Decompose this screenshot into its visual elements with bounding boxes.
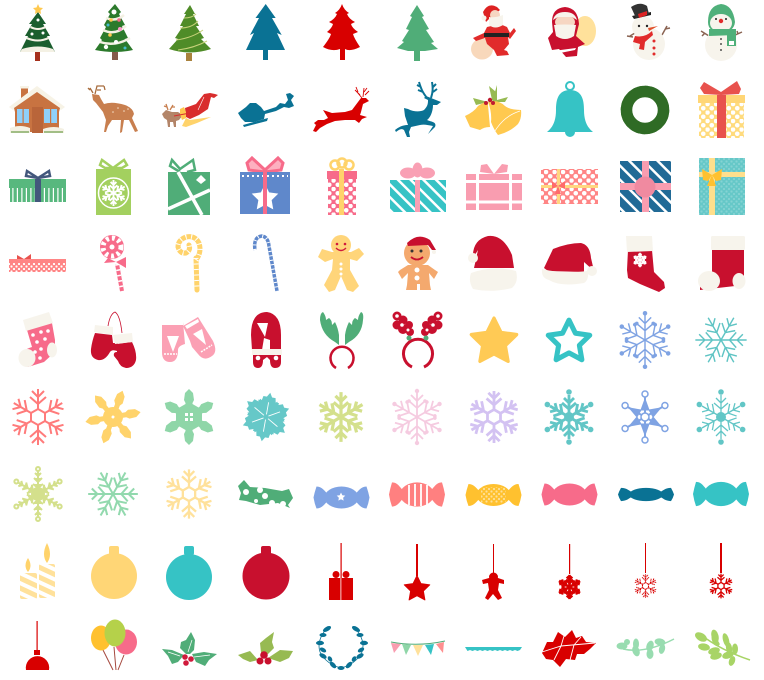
icon: teal solid snowflake (235, 388, 297, 446)
icon: lilac snowflake (468, 391, 520, 443)
icon: crimson stocking with snowflake (626, 236, 665, 292)
icon: teal bauble (166, 546, 212, 600)
icon: green tree with garland (95, 4, 133, 60)
icon: blue candy with star (314, 486, 370, 508)
icon: yellow bauble (91, 546, 137, 599)
icon: gingerbread with santa hat (398, 237, 438, 290)
icon: hanging open snowflake (709, 543, 733, 598)
icon: red mittens with string (91, 312, 136, 368)
icon: teal sleigh silhouette (238, 93, 294, 127)
icon: salmon snowflake (10, 389, 66, 445)
icon: yellow dotted candy (466, 484, 522, 506)
icon: green candy with dots (238, 480, 293, 508)
icon: decorated dark green tree with star (20, 4, 55, 61)
icon: pink lollipop (100, 235, 126, 291)
icon: snowy cabin (9, 86, 65, 133)
icon: yellow-green snowflake (316, 392, 366, 442)
icon: santa with sack (471, 5, 516, 60)
icon: teal thin snowflake (686, 305, 756, 375)
icon: yellow candy cane swirl (178, 237, 200, 290)
icon: mint snowflake (162, 389, 216, 445)
icon: salmon striped candy (389, 482, 445, 507)
icon: crimson stocking cream toe (698, 236, 746, 291)
icon: yellow star (471, 318, 517, 361)
icon: pine tree with gold garland (169, 5, 211, 61)
icon: salmon dotted gift (541, 169, 598, 204)
icon: pale pink snowflake (388, 389, 446, 445)
icon: green holly with berries (162, 632, 217, 666)
icon: pale yellow lace snowflake (164, 469, 214, 519)
icon: red spotted antler headband (392, 312, 442, 367)
icon: green bar gift with navy ribbon (9, 171, 66, 202)
icon: teal tree silhouette (246, 4, 285, 60)
icon: flat salmon gift box (9, 254, 66, 272)
icon: santa in crimson with yellow sack (548, 7, 596, 57)
icon: hanging gingerbread (482, 544, 504, 600)
icon: bunting flags (391, 641, 445, 656)
icon: yellow snowflake (79, 382, 147, 452)
icon: teal dotted snowflake (541, 389, 597, 445)
icon: mint leaf branch (616, 638, 674, 659)
icon: green gift with white ribbon (168, 160, 210, 215)
icon: blue ring snowflake (620, 391, 670, 443)
icon: santa hat large (468, 236, 517, 291)
icon: hanging fine snowflake (633, 543, 658, 598)
icon: green antler headband (320, 312, 363, 368)
icon: teal bell (547, 82, 593, 137)
icon: bright green tree silhouette (397, 5, 438, 61)
icon: hanging dense snowflake (557, 544, 582, 599)
icon: lime gift with snowflake disc (96, 160, 131, 215)
icon: snowman with green hood (701, 4, 742, 61)
icon: balloons (91, 620, 137, 670)
icon: olive holly with berries (238, 632, 293, 664)
icon: teal laurel wreath (316, 625, 368, 670)
icon: pink mittens (162, 317, 215, 362)
icon: striped candles (20, 543, 55, 599)
icon: teal gift with gold bow (699, 158, 745, 215)
icon: teal striped gift with pink bow (390, 162, 446, 212)
icon: blue gift with star (240, 158, 290, 214)
icon: santa hat wide (542, 243, 597, 284)
icon: golden bells with holly (465, 85, 521, 135)
icon: green leaf branch (693, 629, 750, 667)
icon: red leaping deer (313, 87, 369, 132)
icon: reindeer and red sleigh (162, 93, 218, 127)
icon: snowman with top hat (627, 4, 670, 60)
icon: dark teal candy (618, 488, 674, 501)
icon: navy striped gift with flower (620, 161, 671, 212)
icon: brown deer (88, 86, 138, 133)
icon: pink banded gift (466, 164, 522, 210)
icon: hanging red ornament (26, 621, 49, 670)
icon: blue dotted snowflake (615, 311, 675, 369)
icon: teal outline star (548, 320, 590, 360)
icon: yellow gingerbread (318, 235, 364, 292)
icon: hanging red star (404, 544, 430, 600)
icon: yellow-green radial snowflake (12, 467, 64, 521)
icon: teal candy (693, 482, 749, 506)
icon: pink candy (542, 484, 598, 506)
icon: pink stocking (18, 312, 57, 367)
icon: red holly leaf (542, 630, 596, 667)
icon: teal running reindeer (395, 82, 441, 137)
icon: teal ball-tip snowflake (693, 389, 749, 445)
icon: red tree silhouette (323, 4, 360, 60)
icon: yellow gift with red ribbon (698, 81, 745, 138)
icon: blue candy cane (255, 236, 277, 291)
icon: crimson scarf (251, 312, 282, 368)
icon: pink gift with yellow ribbon (327, 158, 357, 215)
icon: crimson bauble (242, 546, 290, 600)
icon: green wreath (622, 87, 668, 133)
icon: mint branch snowflake (79, 460, 147, 528)
icon: teal fringe banner (465, 647, 522, 651)
icon: hanging red gift (329, 543, 353, 600)
